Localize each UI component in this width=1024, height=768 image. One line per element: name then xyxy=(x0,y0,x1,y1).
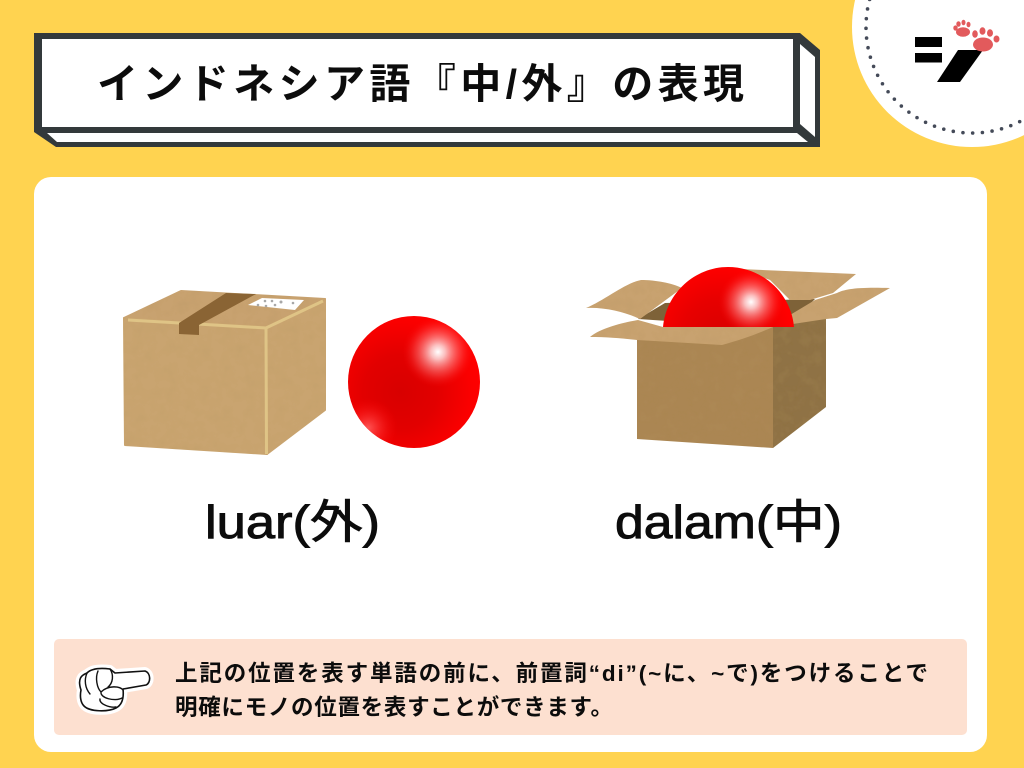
note text: 上記の位置を表す単語の前に、前置詞“di”(~に、~で)をつけることで xyxy=(175,661,928,686)
label: luar: luar(外) xyxy=(205,496,380,548)
label: dalam: dalam(中) xyxy=(615,496,842,548)
open cardboard box with ball xyxy=(586,267,890,448)
main panel xyxy=(34,177,987,752)
logo badge xyxy=(852,0,1024,147)
red ball xyxy=(348,316,480,448)
title text: インドネシア語『中/外』の表現 xyxy=(97,61,744,107)
note panel: 明確にモノの位置を表すことができます。 xyxy=(175,694,613,720)
closed cardboard box xyxy=(124,291,325,454)
half ball xyxy=(663,267,794,327)
note panel xyxy=(54,639,967,735)
icon: pointing hand xyxy=(80,668,150,711)
title box xyxy=(34,33,820,147)
